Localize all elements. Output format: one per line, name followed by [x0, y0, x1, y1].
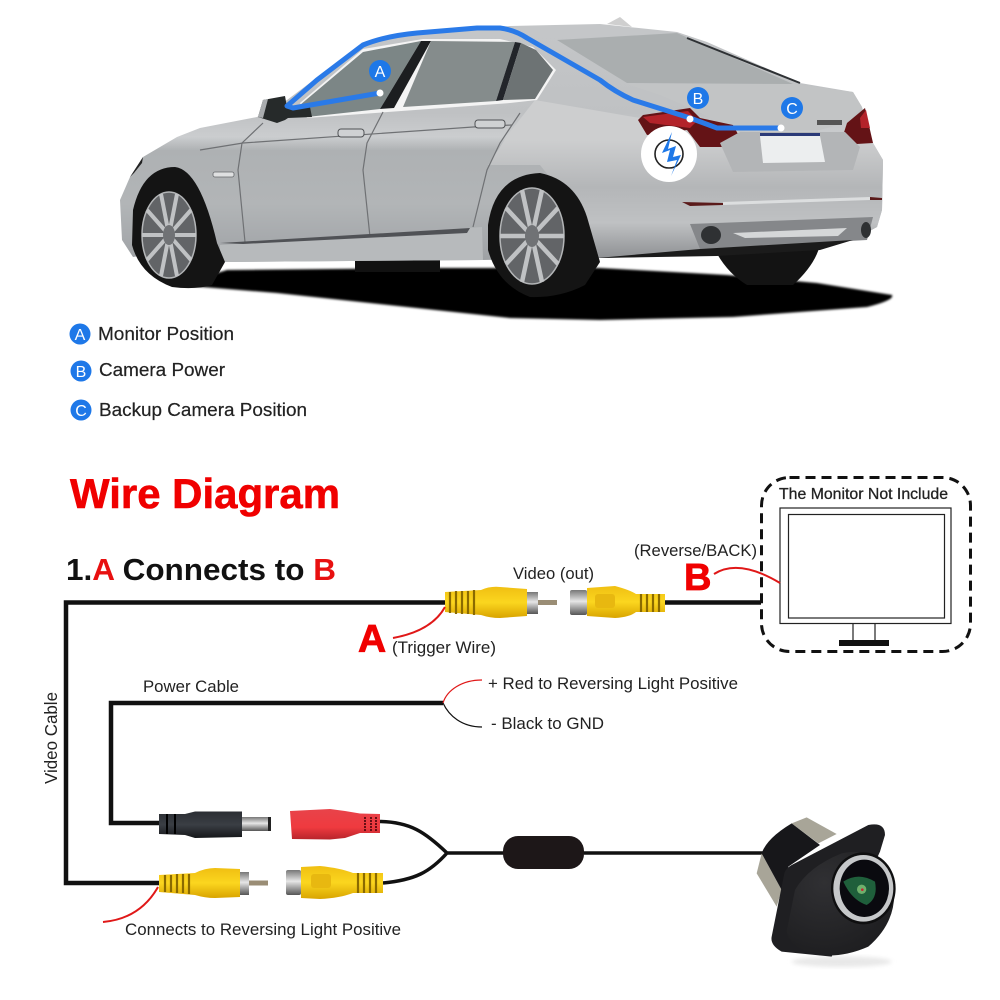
legend	[70, 324, 307, 420]
red lead label: + Red to Reversing Light Positive	[488, 674, 738, 693]
roof antenna	[607, 17, 632, 27]
side mirror	[258, 96, 312, 123]
front side window	[300, 41, 421, 117]
marker A	[369, 60, 391, 96]
black DC plug	[159, 812, 271, 838]
plate recess	[720, 132, 860, 172]
lens ring	[833, 855, 893, 922]
power cable black lead	[443, 703, 482, 727]
quarter window	[503, 43, 553, 100]
video cable label: Video Cable	[41, 692, 61, 784]
marker C: C	[786, 101, 798, 118]
red DC socket	[290, 809, 380, 840]
A leader line	[393, 607, 445, 638]
far rear tyre	[715, 245, 820, 285]
title: Wire Diagram	[70, 470, 340, 517]
dashed boundary	[762, 478, 970, 652]
rear bumper detail	[597, 197, 882, 258]
big red A: A	[358, 618, 386, 661]
rear wheel	[488, 173, 600, 297]
black lead label: - Black to GND	[491, 714, 604, 733]
inline control box	[503, 836, 584, 869]
top male yellow RCA plug	[445, 587, 557, 618]
side sill	[220, 227, 483, 262]
camera cable fork	[380, 822, 765, 883]
camera flange	[771, 824, 885, 957]
trunk lid	[627, 84, 862, 132]
trigger wire label: (Trigger Wire)	[392, 638, 496, 657]
monitor with dashed outline	[762, 478, 970, 652]
video cable to monitor	[664, 600, 761, 605]
monitor note: The Monitor Not Include	[779, 486, 948, 503]
licence plate	[760, 133, 825, 163]
top female yellow RCA plug	[570, 586, 665, 618]
blue cable route	[287, 28, 780, 128]
door handles	[338, 120, 505, 137]
mounting clips	[792, 817, 837, 843]
marker C	[778, 97, 803, 132]
subtitle: 1.A Connects to B	[66, 553, 336, 587]
far front tyre	[355, 258, 440, 272]
power cable label: Power Cable	[143, 677, 239, 696]
legend item B: Camera Power	[99, 360, 225, 380]
legend item C: C	[75, 403, 87, 420]
lens reflection	[843, 877, 876, 905]
legend item B: B	[76, 364, 86, 381]
lower male yellow RCA plug	[159, 868, 268, 898]
trunk badge	[817, 120, 842, 125]
C pillar	[496, 42, 521, 101]
marker B	[686, 87, 709, 122]
fender indicator	[213, 172, 234, 177]
camera shadow	[792, 956, 892, 967]
lower female yellow RCA plug	[286, 866, 383, 899]
power point badge	[641, 126, 697, 182]
power cable red lead	[443, 680, 482, 703]
lens glass	[840, 860, 889, 917]
monitor stand	[853, 624, 875, 640]
car body	[120, 24, 883, 262]
marker A: A	[375, 64, 386, 81]
headlight	[130, 157, 143, 177]
legend item A: A	[75, 327, 86, 344]
legend item A: Monitor Position	[98, 324, 234, 344]
chrome window surround	[300, 39, 556, 118]
reversing light label: Connects to Reversing Light Positive	[125, 920, 401, 939]
body crease and door seams	[200, 112, 520, 242]
front wheel	[132, 167, 225, 288]
tail lights	[638, 108, 873, 147]
reverse label: (Reverse/BACK)	[634, 541, 757, 560]
lens surround	[831, 852, 896, 924]
reversing light lead	[103, 887, 158, 922]
video cable	[66, 602, 446, 883]
B leader line	[714, 568, 780, 583]
rear windshield	[557, 33, 793, 84]
power cable	[111, 703, 443, 823]
rear quarter and bumper	[488, 100, 883, 258]
camera housing	[762, 823, 820, 890]
backup camera	[757, 817, 896, 967]
rear window frame	[687, 38, 800, 83]
monitor screen	[780, 508, 951, 624]
video out label: Video (out)	[513, 564, 594, 583]
marker B: B	[693, 91, 703, 108]
camera dome	[787, 852, 894, 956]
legend item C: Backup Camera Position	[99, 400, 307, 420]
car shadow	[178, 268, 892, 320]
rear door window	[403, 41, 515, 107]
car illustration with cable route	[120, 17, 892, 320]
B pillar	[380, 41, 431, 109]
big red B: B	[684, 557, 711, 599]
